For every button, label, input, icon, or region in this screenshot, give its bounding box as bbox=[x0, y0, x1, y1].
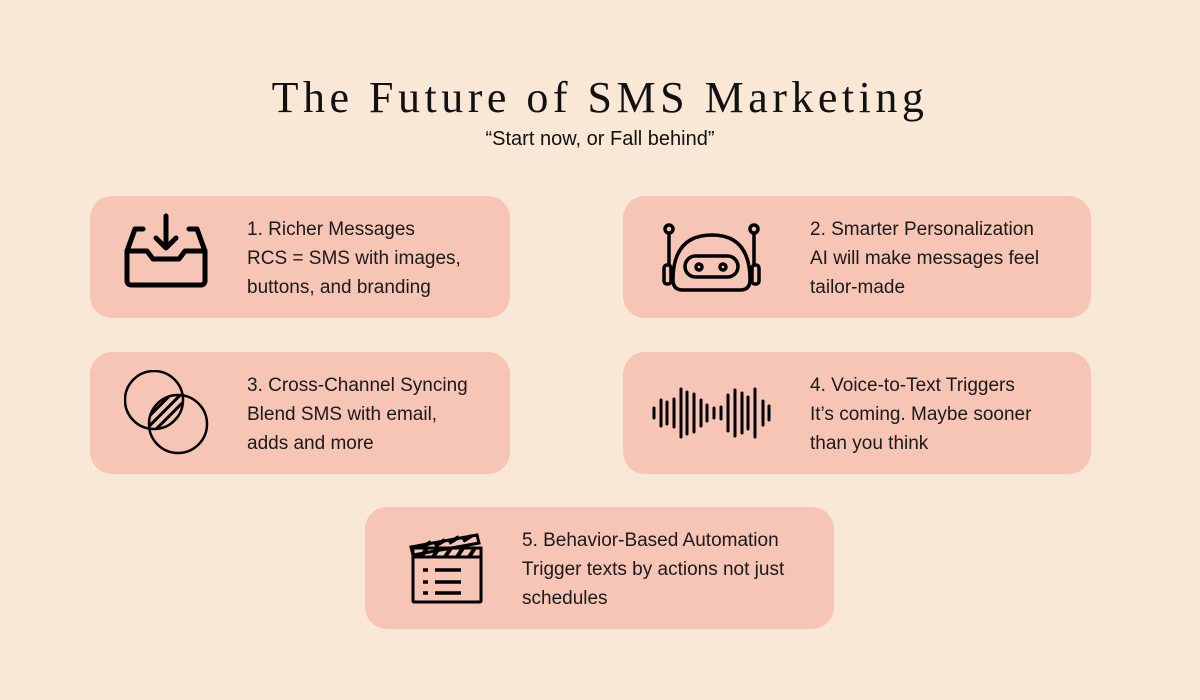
text: Trigger texts by actions not just bbox=[522, 559, 784, 580]
panel: behavior-based automation bbox=[365, 507, 834, 629]
icon: inbox bbox=[124, 214, 208, 288]
text: buttons, and branding bbox=[247, 277, 431, 298]
text bbox=[247, 219, 461, 298]
icon: clapperboard bbox=[409, 533, 482, 604]
text bbox=[247, 375, 468, 454]
text: than you think bbox=[810, 433, 928, 454]
text: 3. Cross-Channel Syncing bbox=[247, 375, 468, 396]
text: Blend SMS with email, bbox=[247, 404, 437, 425]
panel: voice-to-text bbox=[623, 352, 1091, 474]
icon: waveform bbox=[652, 388, 770, 438]
text: 1. Richer Messages bbox=[247, 219, 415, 240]
text: It’s coming. Maybe sooner bbox=[810, 404, 1031, 425]
panel: richer messages bbox=[90, 196, 510, 318]
text: tailor-made bbox=[810, 277, 905, 298]
icon: overlapping circles bbox=[124, 370, 208, 454]
text: 4. Voice-to-Text Triggers bbox=[810, 375, 1015, 396]
text: RCS = SMS with images, bbox=[247, 248, 461, 269]
text: schedules bbox=[522, 588, 608, 609]
text: 2. Smarter Personalization bbox=[810, 219, 1034, 240]
text bbox=[522, 530, 784, 609]
subtitle: “Start now, or Fall behind” bbox=[486, 128, 714, 150]
title: The Future of SMS Marketing bbox=[272, 73, 928, 122]
icon: robot bbox=[662, 223, 761, 292]
panel: smarter personalization bbox=[623, 196, 1091, 318]
text: AI will make messages feel bbox=[810, 248, 1039, 269]
text: 5. Behavior-Based Automation bbox=[522, 530, 779, 551]
text bbox=[810, 375, 1032, 454]
panel: cross-channel syncing bbox=[90, 352, 510, 474]
text bbox=[810, 219, 1039, 298]
text: adds and more bbox=[247, 433, 374, 454]
